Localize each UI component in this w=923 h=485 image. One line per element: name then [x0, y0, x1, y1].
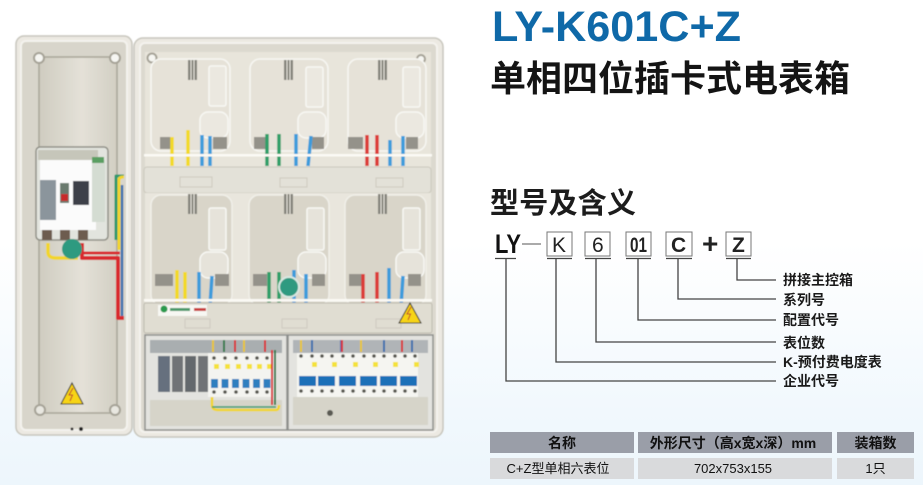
specification table: 外形尺寸（高x宽x深）mm [650, 435, 816, 451]
subtitle: 单相四位插卡式电表箱 [490, 58, 850, 99]
left door [16, 36, 132, 435]
upper meter windows [151, 59, 426, 151]
specification table: C+Z型单相六表位 [507, 461, 609, 476]
model code letters [552, 228, 745, 259]
leader labels [783, 272, 882, 389]
title: LY-K601C+Z [492, 3, 741, 51]
leader labels: 表位数 [783, 335, 825, 351]
leader labels: 企业代号 [783, 373, 839, 389]
specification table: 名称 [548, 435, 576, 451]
lower wires [177, 268, 403, 306]
warning triangle left [61, 383, 83, 404]
model code boxes [547, 232, 751, 256]
terminal blocks upper [160, 137, 418, 149]
model code diagram [495, 228, 882, 389]
model code letters: C [671, 234, 686, 257]
vent slots top [188, 60, 387, 80]
right breaker compartment [288, 335, 433, 430]
leader labels: K-预付费电度表 [783, 354, 882, 370]
model code letters: 6 [592, 234, 604, 257]
upper strap [144, 167, 431, 193]
right cabinet [134, 38, 443, 437]
leader labels: 拼接主控箱 [783, 272, 853, 288]
specification table [490, 432, 914, 479]
meter sockets upper [200, 66, 424, 138]
heading: model meaning: 型号及含义 [490, 187, 636, 220]
model code letters: + [702, 228, 718, 259]
model code letters: 01 [630, 234, 647, 257]
warning triangle right [399, 303, 421, 323]
specification table: 装箱数 [854, 435, 896, 451]
specification table: 1只 [865, 461, 886, 476]
product photo: meter box [16, 36, 443, 437]
main breaker box [36, 147, 108, 259]
model code prefix: LY [495, 229, 521, 259]
left breaker compartment [145, 335, 287, 430]
leader labels: 配置代号 [783, 312, 839, 328]
lower strap [144, 303, 432, 333]
left door wiring [48, 176, 124, 318]
model code letters: Z [732, 234, 745, 257]
lower meter windows [145, 193, 431, 305]
green seal [279, 277, 299, 297]
leader lines [495, 258, 776, 381]
leader labels: 系列号 [783, 292, 825, 308]
specification table: 702x753x155 [694, 461, 772, 476]
upper wires [172, 130, 403, 166]
model code letters: K [552, 234, 566, 257]
